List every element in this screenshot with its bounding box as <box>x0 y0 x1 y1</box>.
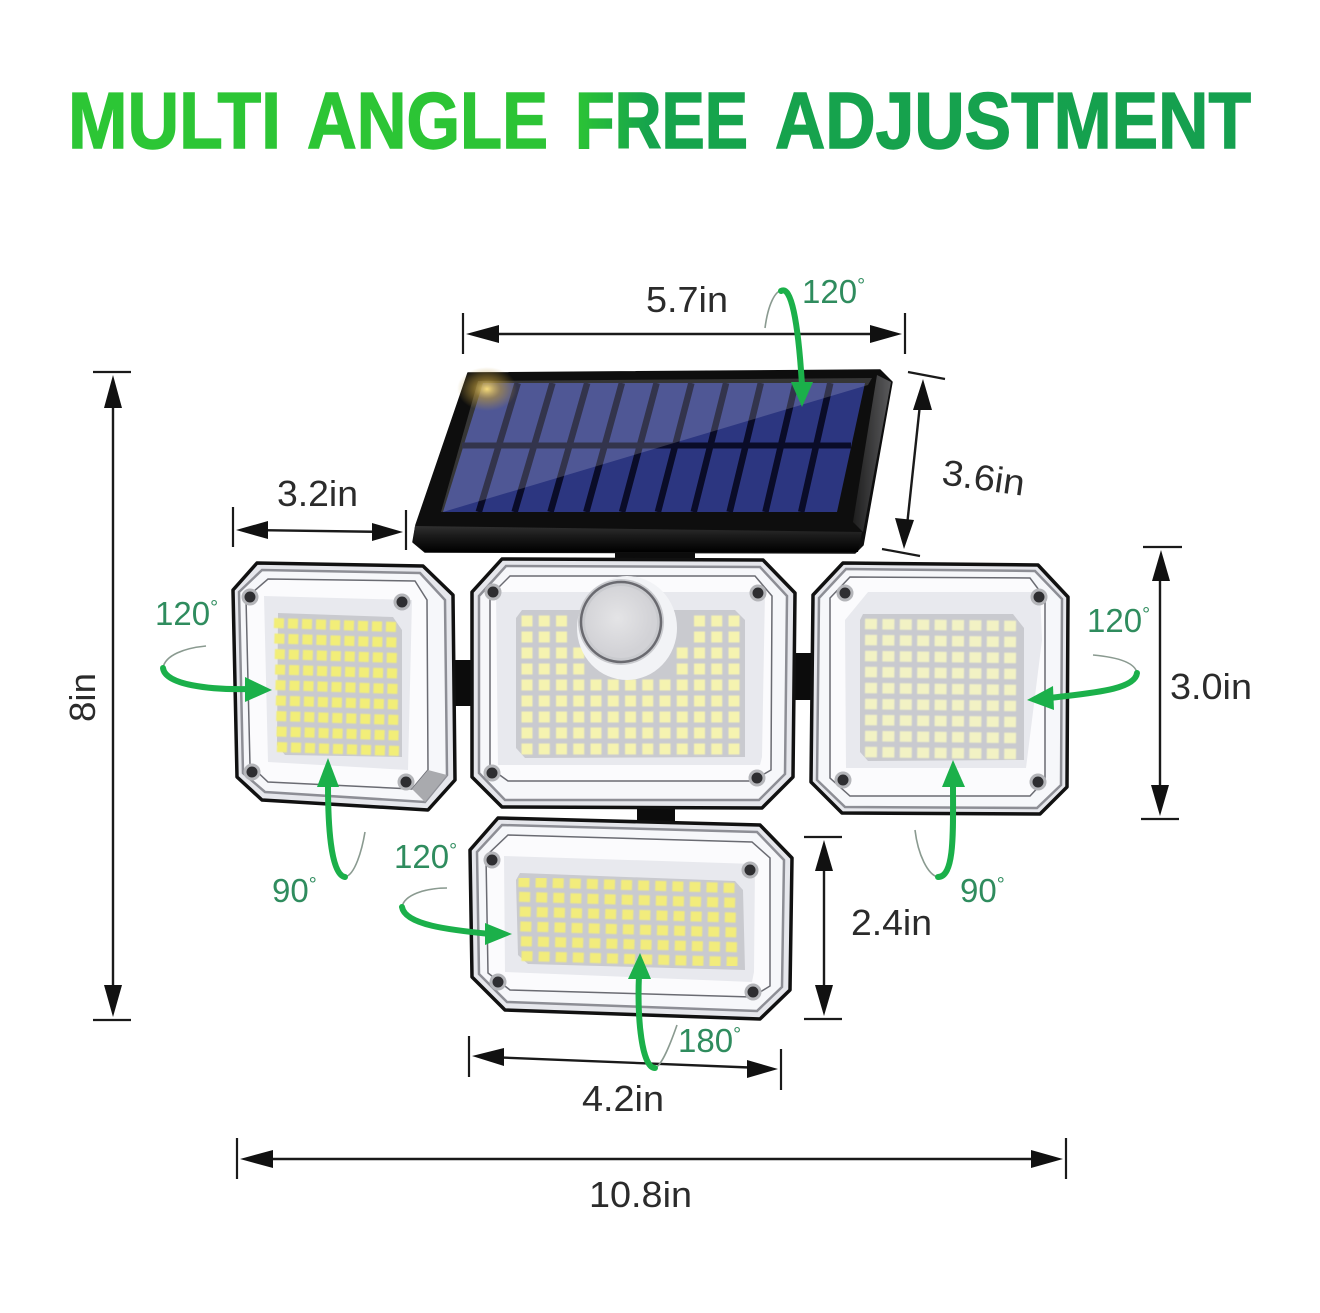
dimension: 10.8in: 10.8in <box>589 1174 692 1215</box>
dimension: 3.6in: 3.6in <box>940 451 1028 504</box>
rotation arrow: right head 90 degrees: ° <box>997 874 1005 896</box>
dimension: 3.6in <box>882 372 1028 556</box>
dimension: 2.4in: 2.4in <box>851 902 932 943</box>
dimension: 3.2in <box>233 473 406 550</box>
rotation arrow: left head 120 degrees: 120 <box>155 595 210 632</box>
rotation arrow: left head 120 degrees <box>155 595 272 702</box>
rotation arrow: bottom head 180 degrees: 180 <box>678 1022 733 1059</box>
rotation arrow: left head 90 degrees: ° <box>309 874 317 896</box>
LED grid <box>865 624 1016 754</box>
screws <box>836 586 1046 789</box>
rotation arrow: bottom head 120 degrees: ° <box>449 840 457 862</box>
LED plate <box>516 610 745 758</box>
title: FREE <box>575 76 748 165</box>
solar cells <box>441 378 872 512</box>
sun glare <box>457 367 517 411</box>
corner shading <box>412 770 447 802</box>
title <box>68 76 1251 165</box>
rotation arrow: bottom head 180 degrees <box>628 953 741 1068</box>
solar frame front lip <box>413 526 862 552</box>
LED plate <box>516 873 745 970</box>
screws <box>485 585 765 785</box>
rotation arrow: left head 90 degrees <box>272 758 365 909</box>
LED plate <box>277 613 402 757</box>
bottom lamp head <box>470 818 792 1019</box>
dimension: 5.7in: 5.7in <box>646 279 728 320</box>
rotation arrow: right head 120 degrees: 120 <box>1087 602 1142 639</box>
screws <box>485 853 760 999</box>
dimension: 8in: 8in <box>62 673 103 722</box>
dimension: 8in <box>62 372 131 1020</box>
rotation arrow: right head 90 degrees: 90 <box>960 872 997 909</box>
screws <box>243 590 413 789</box>
reflection <box>441 378 872 512</box>
center lamp head <box>472 559 795 808</box>
dimension: 10.8in <box>237 1138 1066 1215</box>
dimension: 4.2in <box>469 1036 781 1119</box>
dimension: 3.0in <box>1141 547 1252 819</box>
solar panel frame <box>413 370 892 553</box>
LED grid <box>522 621 740 749</box>
title: MULTI <box>68 76 281 165</box>
rotation arrow: left head 120 degrees: ° <box>210 597 218 619</box>
connector brackets between lamp heads <box>455 550 811 822</box>
left lamp head <box>233 563 455 810</box>
rotation arrow: solar panel 120 degrees: ° <box>857 275 865 297</box>
title: ADJUSTMENT <box>775 76 1251 165</box>
LED grid <box>518 882 738 962</box>
solar panel <box>413 367 892 553</box>
LED grid <box>274 623 399 751</box>
dimension: 4.2in: 4.2in <box>582 1078 664 1119</box>
rotation arrow: right head 90 degrees <box>915 760 1005 909</box>
rotation arrow: bottom head 120 degrees: 120 <box>394 838 449 875</box>
LED plate <box>860 614 1024 761</box>
title: ANGLE <box>307 76 548 165</box>
dimension: 2.4in <box>804 837 932 1019</box>
solar frame right bevel <box>853 375 891 532</box>
dimension: 3.2in: 3.2in <box>277 473 358 514</box>
rotation arrow: bottom head 120 degrees <box>394 838 512 945</box>
rotation arrow: solar panel 120 degrees <box>765 273 865 407</box>
right lamp head <box>811 563 1068 814</box>
rotation arrow: right head 120 degrees: ° <box>1142 604 1150 626</box>
dimension: 3.0in: 3.0in <box>1170 666 1252 707</box>
rotation arrow: left head 90 degrees: 90 <box>272 872 309 909</box>
rotation arrow: bottom head 180 degrees: ° <box>733 1024 741 1046</box>
motion sensor <box>577 576 677 680</box>
rotation arrow: right head 120 degrees <box>1027 602 1150 710</box>
rotation arrow: solar panel 120 degrees: 120 <box>802 273 857 310</box>
dimension: 5.7in <box>463 279 905 354</box>
